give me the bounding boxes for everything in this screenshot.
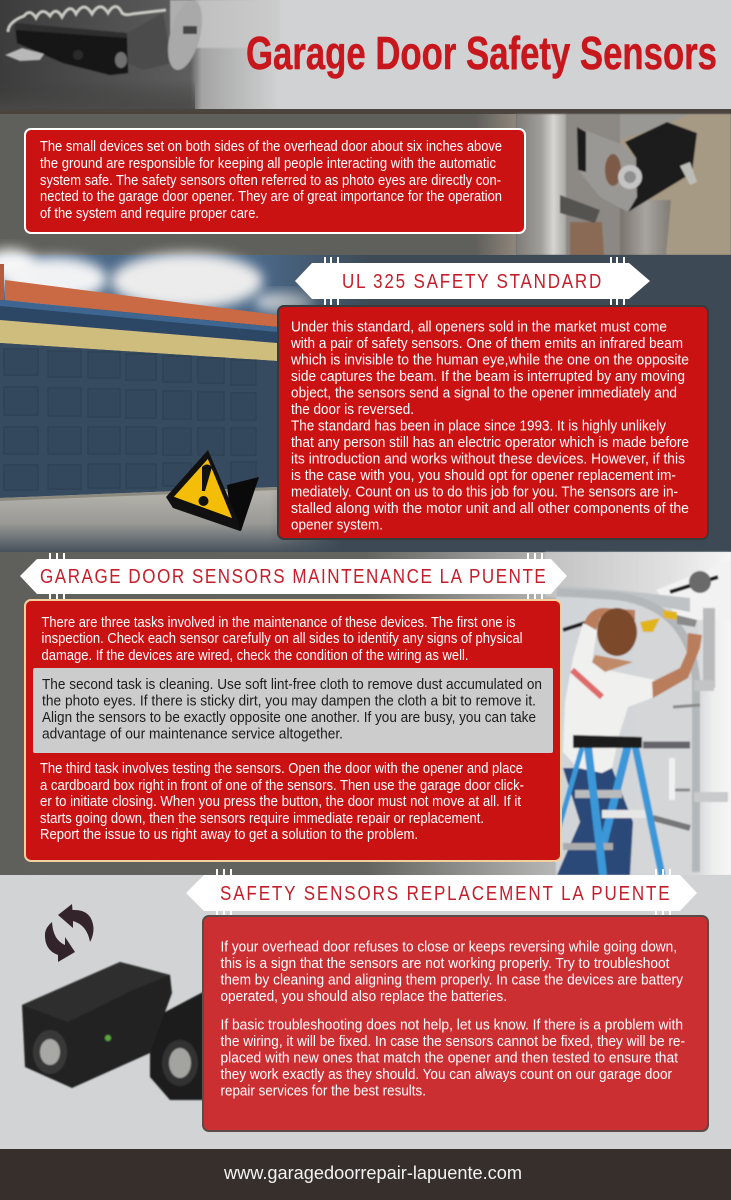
replacement text box: placed with new ones that match the opener and then tested to ensure that: [220, 1050, 678, 1066]
replacement text box: operated, you should also replace the batteries.: [220, 989, 507, 1005]
ribbon: maintenance heading: [20, 553, 567, 599]
photo: garage door and roof: [0, 249, 370, 552]
footer: [0, 1149, 731, 1200]
text: testing: The third task involves testing the sensors. Open the door with the opener and place: [40, 761, 523, 777]
ribbon: replacement heading: [186, 869, 697, 916]
intro text box: the ground are responsible for keeping all people interacting with the automatic: [40, 156, 496, 172]
text: testing: a cardboard box right in front of one of the sensors. Then use the garage door click-: [40, 778, 524, 794]
panel: cleaning: The second task is cleaning. Use soft lint-free cloth to remove dust accumulated on: [42, 677, 542, 693]
panel: cleaning: [33, 668, 553, 753]
intro text box: system safe. The safety sensors often referred to as photo eyes are directly con-: [40, 173, 501, 189]
UL 325 text box: object, the sensors send a signal to the opener immediately and: [291, 386, 677, 402]
header band: [0, 0, 731, 114]
replacement text box: the wiring, it will be fixed. In case the sensors cannot be fixed, they will be re-: [220, 1034, 685, 1050]
panel: cleaning: Align the sensors to be exactly opposite one another. If you are busy, you can take: [42, 710, 536, 726]
UL 325 text box: [278, 306, 708, 539]
maintenance text box: [25, 600, 561, 861]
text: testing: starts going down, then the sensors require immediate repair or replacement.: [40, 811, 484, 827]
ribbon: maintenance heading: GARAGE DOOR SENSORS MAINTENANCE LA PUENTE: [40, 565, 546, 587]
photo: safety sensors: [22, 962, 203, 1100]
UL 325 text box: with a pair of safety sensors. One of them emits an infrared beam: [290, 336, 683, 352]
text: testing: er to initiate closing. When you press the button, the door must not move at all. If it: [40, 794, 521, 810]
intro text box: The small devices set on both sides of the overhead door about six inches above: [40, 139, 502, 155]
text: inspection: [42, 615, 522, 664]
UL 325 text box: that any person still has an electric operator which is made before: [291, 435, 689, 451]
UL 325 text box: mediately. Count on us to do this job for you. The sensors are in-: [291, 484, 678, 500]
replacement text box: them by cleaning and aligning them properly. In case the devices are battery: [220, 972, 684, 988]
replacement text box: this is a sign that the sensors are not working properly. Try to troubleshoot: [220, 956, 670, 972]
text: inspection: There are three tasks involved in the maintenance of these devices. The first one is: [42, 615, 516, 631]
text: testing: [40, 761, 524, 843]
ribbon: UL 325 heading: [295, 257, 650, 305]
footer: www.garagedoorrepair-lapuente.com: [223, 1163, 522, 1183]
ribbon: UL 325 heading: UL 325 SAFETY STANDARD: [342, 270, 601, 292]
replacement text box: If your overhead door refuses to close or keeps reversing while going down,: [220, 940, 677, 956]
UL 325 text box: the door is reversed.: [291, 402, 414, 418]
photo: technician on ladder: [545, 552, 731, 875]
ribbon: replacement heading: SAFETY SENSORS REPLACEMENT LA PUENTE: [220, 882, 670, 904]
replacement text box: repair services for the best results.: [220, 1084, 426, 1100]
panel: cleaning: advantage of our maintenance service altogether.: [42, 726, 343, 742]
text: testing: Report the issue to us right away to get a solution to the problem.: [40, 827, 418, 843]
text: inspection: damage. If the devices are wired, check the condition of the wiring as well.: [42, 648, 468, 664]
intro text box: [25, 129, 525, 233]
intro text box: of the system and require proper care.: [40, 206, 259, 222]
section: replacement: [0, 869, 731, 1149]
panel: cleaning: the photo eyes. If there is sticky dirt, you may dampen the cloth a bit to remove it.: [42, 694, 536, 710]
photo: door track bracket: [516, 114, 731, 255]
UL 325 text box: which is invisible to the human eye,while the one on the opposite: [290, 352, 689, 368]
section: UL 325: [0, 249, 731, 552]
icon: warning sign: [166, 450, 259, 531]
replacement text box: [203, 916, 708, 1131]
text: inspection: inspection. Check each sensor carefully on all sides to identify any signs of physical: [42, 631, 522, 647]
UL 325 text box: side captures the beam. If the beam is interrupted by any moving: [291, 369, 685, 385]
UL 325 text box: is the case with you, you should opt for opener replacement im-: [291, 468, 676, 484]
replacement text box: they work exactly as they should. You can always count on our garage door: [220, 1067, 672, 1083]
section: intro: [0, 114, 731, 255]
UL 325 text box: opener system.: [291, 518, 383, 534]
UL 325 text box: The standard has been in place since 1993. It is highly unlikely: [291, 418, 667, 434]
intro text box: nected to the garage door opener. They are of great importance for the operation: [40, 189, 502, 205]
UL 325 text box: stalled along with the motor unit and all other components of the: [291, 501, 689, 517]
photo: sensor with coiled wire: [5, 0, 280, 75]
replacement text box: If basic troubleshooting does not help, let us know. If there is a problem with: [220, 1018, 683, 1034]
icon: refresh arrows: [45, 904, 94, 962]
section: maintenance: [0, 552, 731, 875]
UL 325 text box: its introduction and works without these devices. However, if this: [291, 452, 685, 468]
UL 325 text box: Under this standard, all openers sold in the market must come: [291, 320, 667, 336]
